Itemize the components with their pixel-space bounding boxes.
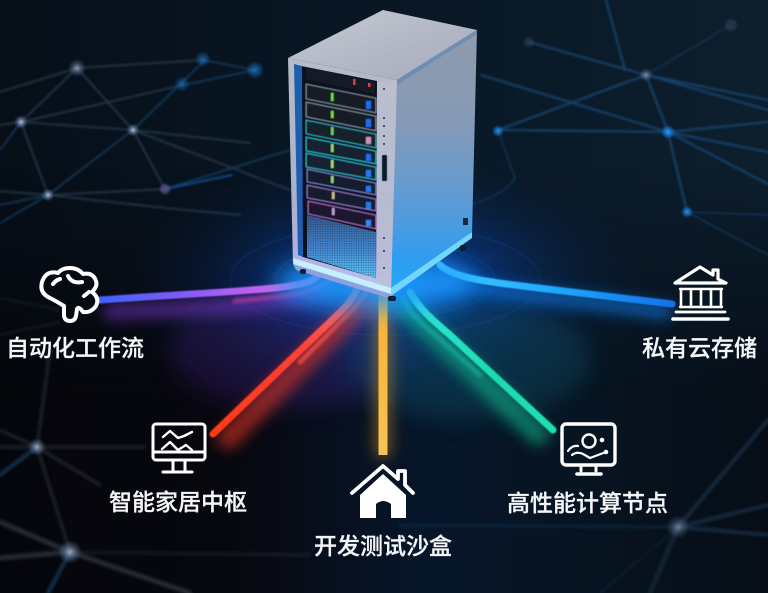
server feet: [300, 245, 466, 301]
top control unit: [306, 67, 375, 94]
icon: monitor with chart: [153, 424, 205, 472]
label: 私有云存储: [642, 335, 757, 361]
network mesh: lower left: [0, 298, 310, 593]
label: 高性能计算节点: [507, 490, 668, 516]
side port: [463, 218, 468, 225]
server front opening: [296, 65, 377, 278]
network mesh: lower right: [400, 420, 768, 593]
icon: monitor with orbit: [562, 424, 615, 474]
ribbon glows: [110, 280, 665, 450]
network node: lower right: [666, 515, 690, 539]
item: smart home hub: [109, 424, 247, 515]
server glow: [275, 257, 475, 309]
side indicators: [383, 88, 385, 269]
item: dev sandbox: [314, 466, 452, 559]
network mesh: upper left: [0, 60, 290, 223]
icon: cloud tree: [41, 268, 97, 321]
ventilation mesh: [307, 215, 376, 278]
ribbon: green to HPC node: [403, 292, 553, 430]
network mesh: upper right: [470, 0, 768, 255]
server base light: [293, 258, 391, 296]
server top face: [288, 10, 477, 80]
item: private cloud storage: [642, 267, 757, 361]
network nodes: upper right: [492, 19, 737, 218]
server front frame: [288, 58, 397, 292]
drive bays: [306, 84, 376, 229]
server right side: [390, 30, 477, 290]
icon: house: [352, 466, 413, 518]
network nodes: lower left: [28, 438, 82, 564]
ribbon: red to smart home hub: [213, 291, 366, 434]
server tower: [275, 10, 477, 309]
side display slot: [382, 155, 387, 181]
ribbon: purple to automation workflow: [100, 277, 329, 301]
item: automation workflow: [6, 268, 144, 361]
ribbon: yellow to dev sandbox: [378, 296, 388, 455]
label: 自动化工作流: [6, 335, 144, 361]
ribbon: blue to private cloud storage: [440, 265, 672, 304]
label: 开发测试沙盒: [314, 533, 452, 559]
network nodes: upper left: [14, 51, 264, 202]
label: 智能家居中枢: [109, 489, 247, 515]
ring glow around server base: [230, 225, 540, 335]
icon: columned building: [673, 267, 728, 319]
item: HPC node: [507, 424, 668, 516]
